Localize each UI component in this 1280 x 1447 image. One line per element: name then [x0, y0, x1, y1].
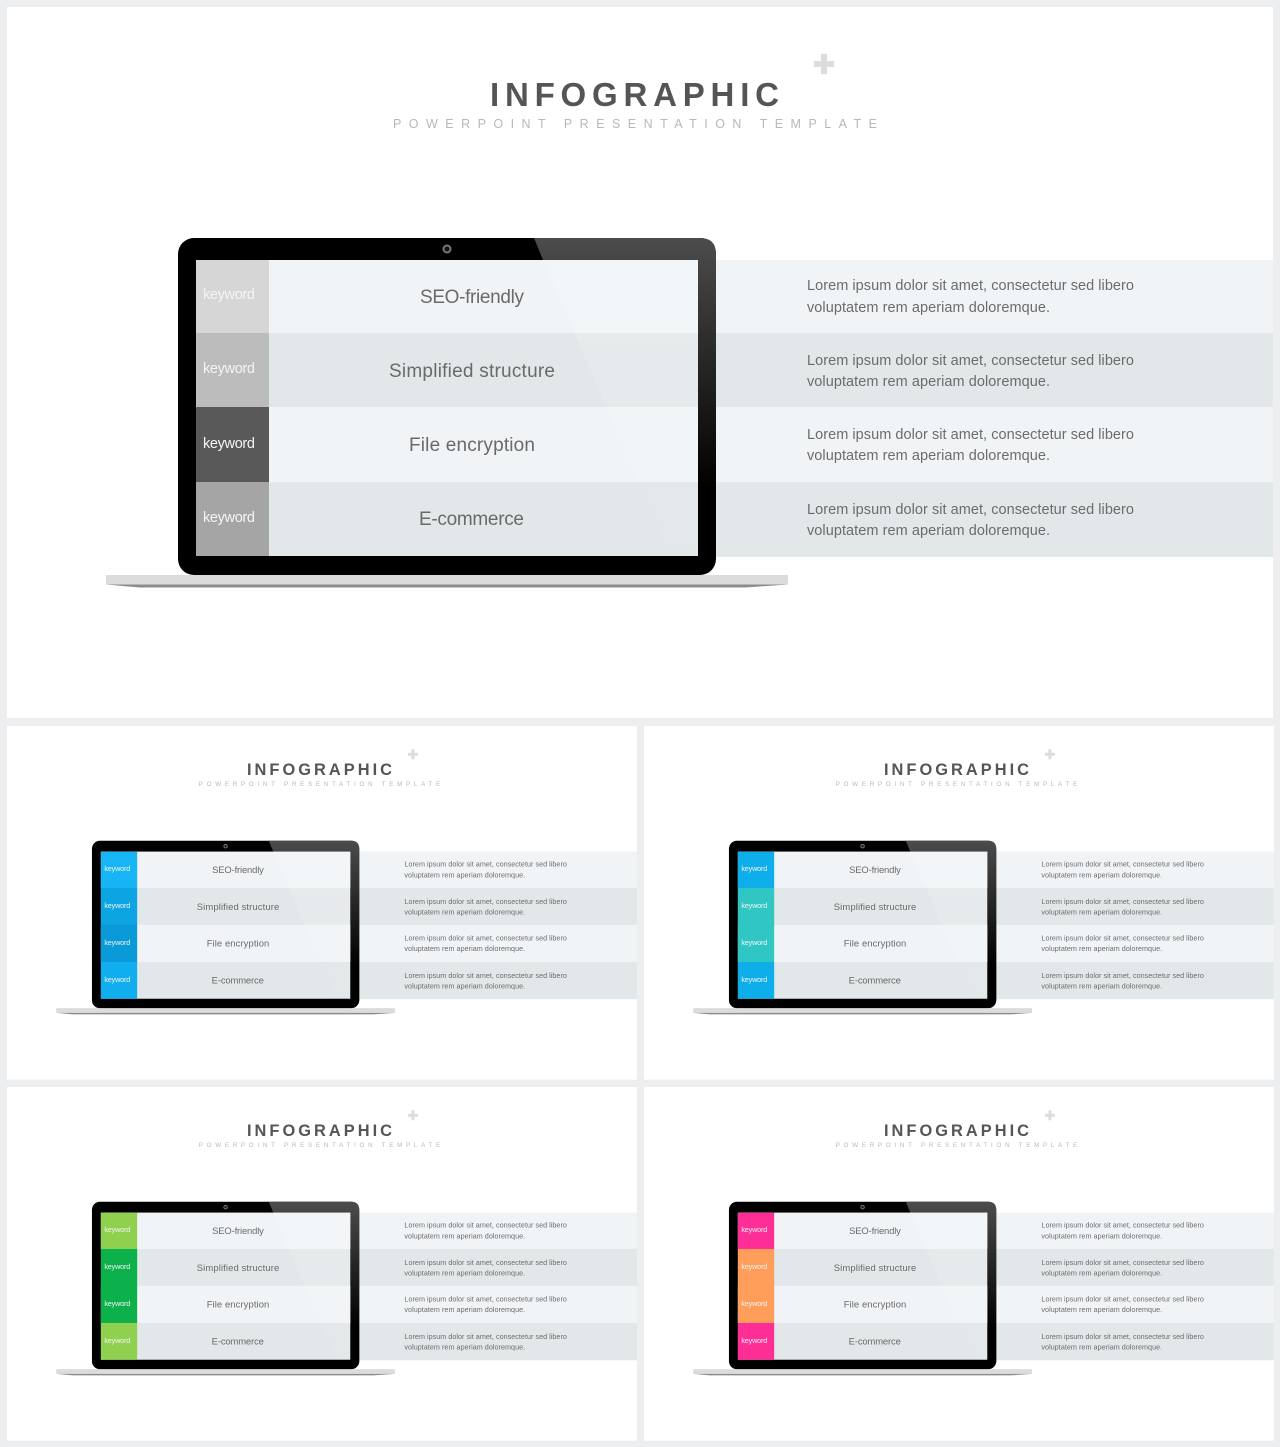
- laptop: keyword: [104, 1299, 130, 1308]
- laptop: File encryption: [844, 938, 906, 949]
- description text: voluptatem rem aperiam doloremque.: [807, 374, 1050, 390]
- laptop: E-commerce: [212, 974, 264, 985]
- laptop: [693, 1202, 1032, 1375]
- description text: voluptatem rem aperiam doloremque.: [1041, 944, 1162, 953]
- description text: voluptatem rem aperiam doloremque.: [404, 907, 525, 916]
- description text: [404, 1221, 567, 1351]
- laptop: keyword: [741, 1262, 767, 1271]
- laptop: File encryption: [844, 1299, 906, 1310]
- icon: plus: [408, 1110, 418, 1120]
- description text: voluptatem rem aperiam doloremque.: [1041, 907, 1162, 916]
- description text: [1041, 1221, 1204, 1351]
- description text: Lorem ipsum dolor sit amet, consectetur sed libero: [1041, 934, 1204, 943]
- title: INFOGRAPHIC: [884, 1122, 1029, 1140]
- description text: voluptatem rem aperiam doloremque.: [1041, 871, 1162, 880]
- subtitle: POWERPOINT PRESENTATION TEMPLATE: [393, 117, 877, 131]
- description text: Lorem ipsum dolor sit amet, consectetur sed libero: [404, 1258, 567, 1267]
- laptop: keyword: [741, 1336, 767, 1345]
- icon: plus: [1045, 749, 1055, 759]
- description text: voluptatem rem aperiam doloremque.: [807, 448, 1050, 464]
- panel: pink slide: [644, 1087, 1274, 1441]
- laptop: E-commerce: [212, 1335, 264, 1346]
- laptop: [693, 841, 1032, 1014]
- title: INFOGRAPHIC: [247, 761, 392, 779]
- laptop: keyword: [104, 864, 130, 873]
- description text: voluptatem rem aperiam doloremque.: [404, 1305, 525, 1314]
- description text: [807, 278, 1134, 539]
- laptop: File encryption: [207, 938, 269, 949]
- laptop: Simplified structure: [197, 901, 279, 912]
- laptop: keyword: [203, 510, 255, 526]
- icon: plus: [814, 54, 834, 74]
- laptop: Simplified structure: [834, 901, 916, 912]
- laptop: keyword: [104, 975, 130, 984]
- description bands: [351, 1213, 637, 1360]
- description text: voluptatem rem aperiam doloremque.: [1041, 981, 1162, 990]
- laptop: SEO-friendly: [849, 864, 901, 875]
- laptop: keyword: [104, 1262, 130, 1271]
- description text: Lorem ipsum dolor sit amet, consectetur sed libero: [1041, 1221, 1204, 1230]
- laptop: Simplified structure: [834, 1262, 916, 1273]
- description text: Lorem ipsum dolor sit amet, consectetur sed libero: [404, 934, 567, 943]
- laptop: keyword: [104, 1225, 130, 1234]
- laptop: keyword: [741, 901, 767, 910]
- description text: voluptatem rem aperiam doloremque.: [404, 944, 525, 953]
- description text: voluptatem rem aperiam doloremque.: [404, 871, 525, 880]
- title: INFOGRAPHIC: [490, 76, 779, 113]
- description text: voluptatem rem aperiam doloremque.: [807, 300, 1050, 316]
- laptop: E-commerce: [419, 509, 524, 530]
- subtitle: POWERPOINT PRESENTATION TEMPLATE: [199, 781, 440, 788]
- description text: Lorem ipsum dolor sit amet, consectetur sed libero: [404, 971, 567, 980]
- icon: plus: [1045, 1110, 1055, 1120]
- laptop: keyword: [104, 938, 130, 947]
- description text: Lorem ipsum dolor sit amet, consectetur sed libero: [1041, 860, 1204, 869]
- laptop: File encryption: [207, 1299, 269, 1310]
- description text: Lorem ipsum dolor sit amet, consectetur sed libero: [807, 353, 1134, 369]
- description text: voluptatem rem aperiam doloremque.: [1041, 1268, 1162, 1277]
- description bands: [988, 852, 1274, 999]
- description text: Lorem ipsum dolor sit amet, consectetur sed libero: [1041, 1332, 1204, 1341]
- description text: [1041, 860, 1204, 990]
- description text: Lorem ipsum dolor sit amet, consectetur sed libero: [1041, 971, 1204, 980]
- laptop: keyword: [104, 1336, 130, 1345]
- description text: Lorem ipsum dolor sit amet, consectetur sed libero: [1041, 1258, 1204, 1267]
- title: INFOGRAPHIC: [884, 761, 1029, 779]
- laptop: keyword: [741, 1299, 767, 1308]
- laptop: [56, 1202, 395, 1375]
- laptop: SEO-friendly: [420, 287, 524, 308]
- description text: Lorem ipsum dolor sit amet, consectetur sed libero: [807, 278, 1134, 294]
- subtitle: POWERPOINT PRESENTATION TEMPLATE: [836, 781, 1077, 788]
- subtitle: POWERPOINT PRESENTATION TEMPLATE: [836, 1142, 1077, 1149]
- panel: main grayscale slide: [7, 7, 1273, 718]
- description text: Lorem ipsum dolor sit amet, consectetur sed libero: [404, 1221, 567, 1230]
- panel: green slide: [7, 1087, 637, 1441]
- subtitle: POWERPOINT PRESENTATION TEMPLATE: [199, 1142, 440, 1149]
- laptop: keyword: [203, 287, 255, 303]
- description text: voluptatem rem aperiam doloremque.: [404, 1232, 525, 1241]
- description text: voluptatem rem aperiam doloremque.: [404, 981, 525, 990]
- laptop: keyword: [104, 901, 130, 910]
- laptop: Simplified structure: [197, 1262, 279, 1273]
- laptop: Simplified structure: [389, 361, 555, 382]
- description text: Lorem ipsum dolor sit amet, consectetur sed libero: [1041, 1295, 1204, 1304]
- laptop: keyword: [741, 938, 767, 947]
- description bands: [988, 1213, 1274, 1360]
- panel: teal slide: [644, 726, 1274, 1080]
- description text: voluptatem rem aperiam doloremque.: [807, 523, 1050, 539]
- laptop: SEO-friendly: [849, 1225, 901, 1236]
- laptop: E-commerce: [849, 1335, 901, 1346]
- laptop: keyword: [741, 864, 767, 873]
- laptop: keyword: [741, 1225, 767, 1234]
- description text: voluptatem rem aperiam doloremque.: [404, 1342, 525, 1351]
- description text: [404, 860, 567, 990]
- description bands: [351, 852, 637, 999]
- laptop: [56, 841, 395, 1014]
- description text: voluptatem rem aperiam doloremque.: [404, 1268, 525, 1277]
- laptop: SEO-friendly: [212, 1225, 264, 1236]
- description bands: [700, 260, 1273, 557]
- laptop: File encryption: [409, 435, 535, 456]
- description text: Lorem ipsum dolor sit amet, consectetur sed libero: [404, 1295, 567, 1304]
- description text: Lorem ipsum dolor sit amet, consectetur sed libero: [404, 897, 567, 906]
- description text: Lorem ipsum dolor sit amet, consectetur sed libero: [1041, 897, 1204, 906]
- description text: Lorem ipsum dolor sit amet, consectetur sed libero: [404, 1332, 567, 1341]
- title: INFOGRAPHIC: [247, 1122, 392, 1140]
- description text: voluptatem rem aperiam doloremque.: [1041, 1232, 1162, 1241]
- laptop: E-commerce: [849, 974, 901, 985]
- description text: Lorem ipsum dolor sit amet, consectetur sed libero: [807, 502, 1134, 518]
- description text: voluptatem rem aperiam doloremque.: [1041, 1305, 1162, 1314]
- icon: plus: [408, 749, 418, 759]
- description text: Lorem ipsum dolor sit amet, consectetur sed libero: [404, 860, 567, 869]
- laptop: keyword: [203, 436, 255, 452]
- description text: voluptatem rem aperiam doloremque.: [1041, 1342, 1162, 1351]
- laptop: [106, 238, 788, 588]
- laptop: keyword: [741, 975, 767, 984]
- laptop: keyword: [203, 361, 255, 377]
- panel: blue slide: [7, 726, 637, 1080]
- laptop: SEO-friendly: [212, 864, 264, 875]
- description text: Lorem ipsum dolor sit amet, consectetur sed libero: [807, 427, 1134, 443]
